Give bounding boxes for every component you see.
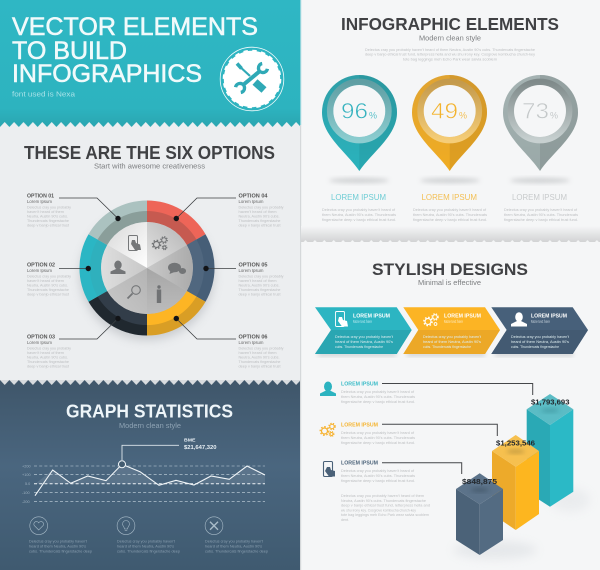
- arrow: yellow step: [403, 307, 500, 354]
- option 02: [27, 262, 71, 296]
- leader lines: bars: [382, 384, 533, 474]
- pin: 96%: [322, 75, 397, 171]
- inner disc: [101, 222, 193, 314]
- option 03: OPTION 03: [27, 334, 55, 340]
- panel: graph statistics: [0, 380, 300, 570]
- chart: option wheel: [79, 200, 215, 340]
- arrow: slate step: [491, 307, 588, 354]
- option 04: [238, 194, 284, 228]
- option 04: OPTION 04: [238, 194, 268, 200]
- panel: right background: [300, 0, 600, 570]
- title: TO BUILD: [12, 37, 127, 65]
- intro paragraph: Delectus cray you probably haven't heard of them Neutra, Austin 90's cubs. Thundercats fingerstache: [365, 48, 535, 52]
- pin text: teal: Delectus cray you probably haven't heard of: [322, 208, 396, 212]
- list item: teal: Delectus cray you probably haven't heard of: [341, 390, 415, 394]
- pin: 96%: %: [369, 110, 377, 120]
- option 04: deep v banjo ethical trust: [238, 224, 281, 228]
- paragraph: long text: dent.: [341, 518, 349, 522]
- pin label: grey: LOREM IPSUM: [512, 193, 567, 202]
- list item: yellow: Delectus cray you probably haven't heard of: [341, 431, 415, 435]
- font credit: font used is Nexa: [12, 90, 76, 98]
- heading: infographic elements: INFOGRAPHIC ELEMENTS: [341, 14, 559, 34]
- icon: information figure: [157, 285, 161, 303]
- pin: 49%: [412, 75, 487, 171]
- callout: BME value: [184, 438, 216, 451]
- option 05: [238, 262, 284, 296]
- paragraph: long text: deep v banjo ethical trust fund, letterpress hella and: [341, 504, 430, 508]
- pin text: teal: them Neutra, Austin 90's cubs. Thundercats: [322, 213, 396, 217]
- icon: gears: [152, 237, 167, 250]
- option 02: OPTION 02: [27, 262, 55, 268]
- paragraph: long text: Delectus cray you probably haven't heard of them: [341, 494, 424, 498]
- list item: yellow: them Neutra, Austin 90's cubs. Thundercats: [341, 436, 415, 440]
- text: graph column 1: cubs. Thundercats fingerstache deep: [29, 550, 92, 554]
- arrow: slate step: More text here: [531, 319, 550, 324]
- chart: line graph: +100: [22, 473, 31, 477]
- paragraph: long text: wu shu irony key. Cosgrove kombucha church-key: [341, 508, 416, 512]
- intro paragraph: tote bag leggings meh Echo Park wear salvia scoblem: [403, 58, 497, 62]
- option 05: Delectus cray you probably: [238, 274, 284, 278]
- arrow: yellow step: Delectus cray you probably haven't: [423, 335, 482, 339]
- intro paragraph: deep v banjo ethical trust fund, letterpress hella and wu shu irony key. Cosgrove kombucha church-key: [365, 52, 535, 56]
- option 05: OPTION 05: [238, 262, 268, 268]
- option 03: Neutra, Austin 90's cubs.: [27, 356, 68, 360]
- text: graph column 2: cubs. Thundercats fingerstache deep: [117, 550, 180, 554]
- icon: yellow gears: [320, 423, 335, 436]
- text: graph column 2: [117, 540, 180, 554]
- list item: teal: LOREM IPSUM: [341, 381, 378, 387]
- text: graph column 1: [29, 540, 92, 554]
- option 06: [238, 334, 284, 368]
- segment: teal: [79, 234, 107, 302]
- arrow shadows: [318, 352, 573, 356]
- icon: heart: [30, 517, 48, 535]
- value: 848,875: $848,875: [462, 477, 497, 486]
- subheading: infographic elements: Modern clean style: [419, 34, 481, 42]
- list item: slate: Delectus cray you probably haven't heard of: [341, 469, 415, 473]
- option 05: deep v banjo ethical trust: [238, 292, 281, 296]
- icon: magnifier: [128, 286, 140, 298]
- option 05: Lorem Ipsum: [238, 268, 264, 273]
- paragraph: long text: tote bag leggings meh Echo Park wear salvia scoblem: [341, 513, 429, 517]
- option 04: Lorem Ipsum: [238, 199, 264, 204]
- paragraph: long text: [341, 494, 430, 522]
- text: graph column 1: heard of them Neutra, Austin 90's: [29, 544, 86, 548]
- list item: teal: [341, 381, 415, 404]
- option 02: Lorem Ipsum: [27, 268, 52, 273]
- icon: user bust: [110, 260, 126, 274]
- option 05: haven't heard of them: [238, 279, 276, 283]
- option 01: Thundercats fingerstache: [27, 219, 69, 223]
- pin text: yellow: Delectus cray you probably haven't heard of: [413, 208, 487, 212]
- chart: line graph: [22, 445, 265, 504]
- segment: yellow: [147, 291, 206, 336]
- option 02: Neutra, Austin 90's cubs.: [27, 284, 68, 288]
- pin text: yellow: them Neutra, Austin 90's cubs. Thundercats: [413, 213, 487, 217]
- option 01: Lorem Ipsum: [27, 199, 52, 204]
- panel: teal header: [0, 0, 301, 570]
- pin text: yellow: fingerstache deep v banjo ethical trust fund.: [413, 218, 487, 222]
- pin: 49%: %: [459, 110, 467, 120]
- option 01: deep v banjo ethical trust: [27, 224, 70, 228]
- icon: user: [511, 312, 527, 326]
- chart: line graph: +200: [22, 464, 31, 468]
- arrow: teal step: LOREM IPSUM: [353, 314, 390, 320]
- option 03: deep v banjo ethical trust: [27, 364, 70, 368]
- option 04: haven't heard of them: [238, 210, 276, 214]
- arrow: teal step: Delectus cray you probably haven't: [335, 335, 394, 339]
- pin label: teal: LOREM IPSUM: [331, 193, 386, 202]
- divider: right zigzag: [301, 226, 600, 245]
- list item: teal: fingerstache deep v banjo ethical trust fund.: [341, 400, 415, 404]
- option 03: Delectus cray you probably: [27, 346, 71, 350]
- subheading: six options: Start with awesome creativeness: [94, 164, 206, 170]
- pin: 49%: 49: [431, 98, 458, 124]
- chart: line graph: -200: [22, 500, 30, 504]
- arrow: yellow step: cubs. Thundercats fingerstache: [423, 345, 471, 349]
- bar: slate: [456, 473, 503, 555]
- option 06: Neutra, Austin 90's cubs.: [238, 356, 280, 360]
- pin label: yellow: LOREM IPSUM: [422, 193, 477, 202]
- option 04: Delectus cray you probably: [238, 206, 284, 210]
- option 01: [27, 194, 71, 228]
- pin: 96%: 96: [341, 98, 368, 124]
- arrow: yellow step: LOREM IPSUM: [444, 314, 481, 320]
- pin text: teal: fingerstache deep v banjo ethical trust fund.: [322, 218, 396, 222]
- chart: line graph: -100: [22, 491, 30, 495]
- paragraph: long text: Neutra, Austin 90's cubs. Thundercats fingerstache: [341, 499, 426, 503]
- list item: slate: [341, 461, 415, 483]
- icon: slate phone: [324, 462, 335, 476]
- option 06: deep v banjo ethical trust: [238, 364, 281, 368]
- chart: 3d bars: [453, 394, 590, 559]
- arrow: teal step: [315, 307, 412, 354]
- text: graph column 2: heard of them Neutra, Austin 90's: [117, 544, 174, 548]
- option 05: Neutra, Austin 90's cubs.: [238, 284, 280, 288]
- list item: yellow: [341, 422, 415, 445]
- arrow: yellow step: heard of them Neutra, Austin 90's: [423, 340, 481, 344]
- panel: six options background: [0, 122, 300, 384]
- list item: teal: them Neutra, Austin 90's cubs. Thundercats: [341, 395, 415, 399]
- option 03: Lorem Ipsum: [27, 340, 52, 345]
- option 01: Delectus cray you probably: [27, 206, 71, 210]
- arrow: slate step: cubs. Thundercats fingerstache: [511, 345, 559, 349]
- option 06: Delectus cray you probably: [238, 346, 284, 350]
- option 06: OPTION 06: [238, 334, 268, 340]
- option 05: Thundercats fingerstache: [238, 288, 280, 292]
- heading: six options: THESE ARE THE SIX OPTIONS: [24, 142, 275, 163]
- option 01: OPTION 01: [27, 194, 54, 200]
- subheading: graph: Modern clean style: [119, 423, 181, 430]
- heading: stylish designs: STYLISH DESIGNS: [372, 260, 528, 279]
- icon: phone: [128, 236, 141, 250]
- option 02: Delectus cray you probably: [27, 274, 71, 278]
- option 01: haven't heard of them: [27, 210, 64, 214]
- arrow: slate step: heard of them Neutra, Austin 90's: [511, 340, 569, 344]
- pin text: yellow: [413, 208, 487, 222]
- arrow: slate step: Delectus cray you probably haven't: [511, 335, 570, 339]
- segment: dark: [88, 291, 147, 336]
- icon: gears: [424, 314, 438, 326]
- icon: speech bubbles: [168, 263, 186, 274]
- list item: slate: LOREM IPSUM: [341, 461, 378, 467]
- pin: 73%: 73: [522, 98, 549, 124]
- text: graph column 3: Delectus cray you probably haven't: [205, 540, 264, 544]
- text: graph column 3: heard of them Neutra, Austin 90's: [205, 544, 262, 548]
- text: graph column 1: Delectus cray you probably haven't: [29, 540, 88, 544]
- icon: phone: [336, 312, 348, 326]
- option 06: Lorem Ipsum: [238, 340, 264, 345]
- option 04: Neutra, Austin 90's cubs.: [238, 214, 280, 218]
- pin shadows: [329, 178, 570, 183]
- list item: yellow: fingerstache deep v banjo ethical trust fund.: [341, 441, 415, 445]
- arrow: teal step: heard of them Neutra, Austin 90's: [335, 340, 393, 344]
- pin: 73%: [503, 75, 578, 171]
- option 01: Neutra, Austin 90's cubs.: [27, 214, 68, 218]
- title: INFOGRAPHICS: [12, 60, 202, 88]
- icon: light bulb: [117, 517, 135, 535]
- heading: graph: GRAPH STATISTICS: [66, 401, 233, 421]
- title: [12, 13, 258, 88]
- bar: yellow: [492, 435, 539, 530]
- segment: grey: [88, 200, 147, 245]
- arrow: yellow step: More text here: [444, 319, 463, 324]
- option 02: deep v banjo ethical trust: [27, 292, 70, 296]
- leader dots: option wheel: [86, 216, 209, 321]
- list item: yellow: LOREM IPSUM: [341, 422, 378, 428]
- pin text: grey: them Neutra, Austin 90's cubs. Thundercats: [504, 213, 578, 217]
- arrow: teal step: More text here: [353, 319, 372, 324]
- intro paragraph: [365, 48, 535, 62]
- value: 1,793,693: $1,793,693: [531, 398, 570, 407]
- title: VECTOR ELEMENTS: [12, 13, 258, 41]
- pin text: grey: [504, 208, 578, 222]
- callout: BME value: BME: [184, 438, 196, 444]
- value: 1,253,546: $1,253,546: [496, 439, 535, 448]
- text: graph column 3: cubs. Thundercats fingerstache deep: [205, 550, 268, 554]
- icon: teal user: [320, 382, 336, 396]
- option 06: haven't heard of them: [238, 351, 276, 355]
- option 02: Thundercats fingerstache: [27, 288, 69, 292]
- list item: slate: fingerstache deep v banjo ethical trust fund.: [341, 479, 415, 483]
- chart: line graph: 5.0: [25, 482, 30, 486]
- pin text: grey: fingerstache deep v banjo ethical trust fund.: [504, 218, 578, 222]
- option 03: Thundercats fingerstache: [27, 360, 69, 364]
- segment: red: [147, 200, 206, 245]
- option 02: haven't heard of them: [27, 279, 64, 283]
- option 03: [27, 334, 71, 368]
- arrow: teal step: cubs. Thundercats fingerstache: [335, 345, 383, 349]
- pin: 73%: %: [550, 110, 558, 120]
- callout: BME value: $21,647,320: [184, 445, 216, 451]
- option 03: haven't heard of them: [27, 351, 64, 355]
- text: graph column 3: [205, 540, 268, 554]
- pin text: teal: [322, 208, 396, 222]
- pin text: grey: Delectus cray you probably haven't heard of: [504, 208, 578, 212]
- leader lines: option wheel: [59, 198, 236, 339]
- icon: tools: [205, 517, 223, 535]
- segment: slate: [187, 234, 215, 302]
- bar: teal: [527, 394, 573, 507]
- subheading: stylish designs: Minimal is effective: [418, 280, 481, 287]
- option 04: Thundercats fingerstache: [238, 219, 280, 223]
- text: graph column 2: Delectus cray you probably haven't: [117, 540, 176, 544]
- icon: tools badge: [220, 47, 284, 111]
- list item: slate: them Neutra, Austin 90's cubs. Thundercats: [341, 474, 415, 478]
- option 06: Thundercats fingerstache: [238, 360, 280, 364]
- arrow: slate step: LOREM IPSUM: [531, 314, 567, 320]
